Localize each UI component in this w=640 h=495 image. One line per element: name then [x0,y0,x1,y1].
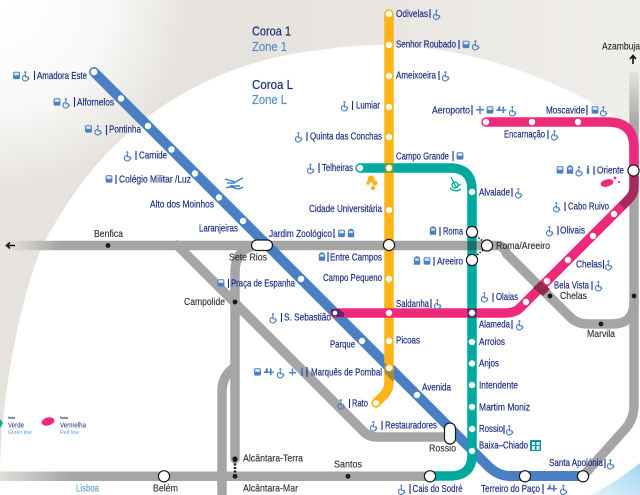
label: Colegio Militar / Luz: Colégio Militar /Luz [119,174,191,186]
label: Picoas: Picoas [396,335,420,347]
line overlaps [331,164,634,382]
label: Arroios: Arroios [479,336,505,348]
label: Aeroporto: Aeroporto [432,104,470,116]
label: Lumiar: Lumiar [356,100,380,112]
label: Amadora Este: Amadora Este [37,70,87,82]
legend: red line: Red line [60,430,79,436]
label: Alcantara-Terra: Alcântara-Terra [243,453,303,465]
label: Pontinha [85,124,141,136]
dotted link Roma Areeiro [476,236,483,256]
label: Avenida: Avenida [422,381,451,393]
label: Entre Campos [319,252,382,264]
label: Anjos: Anjos [479,358,499,370]
legend: green line [0,416,32,436]
label: Rato [338,397,368,409]
label: Ameixoeira: Ameixoeira [396,70,436,82]
label: Santos: Santos [334,459,362,471]
label: Alvalade: Alvalade [479,186,510,198]
label: Cidade Universitaria: Cidade Universitária [309,203,382,215]
label: Rato: Rato [352,397,368,409]
light blue river corner [590,463,640,495]
label: Cabo Ruivo [553,200,609,212]
label: Martim Moniz: Martim Moniz [479,402,530,414]
blue line [94,72,583,476]
label: Moscavide: Moscavide [546,104,585,116]
label: Quinta das Conchas: Quinta das Conchas [310,131,382,143]
station dots: red line [332,119,617,316]
label: Areeiro [414,255,463,267]
icon: teal boat [450,177,461,191]
label: S. Sebastiao: S. Sebastião [284,311,331,323]
label: Pontinha: Pontinha [109,124,141,136]
label: Lumiar [341,100,380,112]
legend: green line: Verde [8,423,24,430]
label: Roma/Areeiro: Roma/Areeiro [496,240,550,252]
label: Belem: Belém [153,483,178,495]
label: Campo Grande: Campo Grande [396,151,449,163]
label: Rossio metro: Rossio [479,423,503,435]
label: Odivelas: Odivelas [396,8,428,20]
label: Carnide [124,150,167,162]
label: Praca de Espanha [218,278,295,290]
icon: red flower Oriente [600,177,620,188]
arrow: up to Azambuja [630,56,636,64]
label: Areeiro: Areeiro [437,255,463,267]
zone labels [252,24,293,107]
icon: orange flower [366,175,378,190]
label: Marques de Pombal [254,366,382,378]
zone labels: Zone 1 [252,40,287,54]
label: Lisboa: Lisboa [76,483,99,495]
label: Alcantara-Mar: Alcântara-Mar [243,483,298,495]
label: Olaias: Olaias [496,291,518,303]
label: Oriente [557,164,624,176]
legend: red line [41,416,86,436]
label: Campolide: Campolide [184,296,225,308]
label: Restauradores: Restauradores [385,419,437,431]
label: Cabo Ruivo: Cabo Ruivo [568,200,609,212]
label: Chelas train: Chelas [560,290,587,302]
label: Parque: Parque [330,339,355,351]
label: Intendente: Intendente [479,379,518,391]
label: Alto dos Moinhos: Alto dos Moinhos [150,198,214,210]
label: Senhor Roubado: Senhor Roubado [396,39,456,51]
label: Alfornelos: Alfornelos [77,96,114,108]
label: Encarnacao: Encarnação [504,128,545,140]
zone labels: Zone L [252,93,287,107]
legend: green line: linha [8,416,15,420]
label: Santa Apolonia: Santa Apolónia [549,457,603,469]
label: Roma [430,226,463,238]
label: Bela Vista: Bela Vista [554,279,589,291]
station dots: blue line [91,69,420,398]
label: Benfica: Benfica [94,228,123,240]
label: Carnide: Carnide [139,150,167,162]
label: Roma: Roma [443,226,463,238]
label: Campo Pequeno: Campo Pequeno [323,272,382,284]
legend: red line: linha [60,416,68,420]
icon: blue swimmer [225,178,243,189]
label: Baixa-Chiado: Baixa–Chiado [479,440,528,452]
zone labels: Coroa 1 [252,24,291,38]
arrow: left from Benfica [6,242,15,248]
label: Amadora Este [13,70,87,82]
label: Telheiras [307,162,353,174]
train stops: black dots [106,243,636,479]
legend: red line: Vermelha [60,423,86,430]
label: Restauradores [370,419,437,431]
label: Marvila: Marvila [587,328,615,340]
label: Aeroporto [432,104,516,116]
label: Cais do Sodre: Cais do Sodré [412,483,463,495]
station dots: yellow line [373,11,392,406]
label: Alfornelos [54,96,114,108]
label: Rossio train: Rossio [429,443,456,455]
label: S. Sebastiao [270,311,331,323]
station dots: green line [357,165,475,454]
label: Terreiro do Paco: Terreiro do Paço [481,483,540,495]
red line [335,122,634,313]
label: Marques de Pombal: Marquês de Pombal [311,366,382,378]
label: Chelas metro: Chelas [576,259,602,271]
dotted link Alcantara [234,460,236,476]
yellow line [376,14,389,403]
legend: green line: Green line [8,430,32,436]
label: Cais do Sodre [398,483,463,495]
label: Sete Rios: Sete Rios [229,252,267,264]
label: Quinta das Conchas [295,131,382,143]
zone labels: Coroa L [252,78,293,92]
label: Telheiras: Telheiras [322,162,353,174]
label: Olivais: Olivais [560,224,585,236]
label: Laranjeiras: Laranjeiras [199,222,238,234]
label: Entre Campos: Entre Campos [330,252,382,264]
label: Alameda: Alameda [479,318,510,330]
label: Oriente: Oriente [597,164,624,176]
label: Olivais [546,224,585,236]
label: Jardim Zoologico: Jardim Zoológico [269,228,332,240]
interchange stations [158,165,639,482]
label: Saldanha: Saldanha [396,298,429,310]
label: Olaias [481,291,518,303]
green line [360,168,472,476]
label: Praca de Espanha: Praça de Espanha [231,278,295,290]
